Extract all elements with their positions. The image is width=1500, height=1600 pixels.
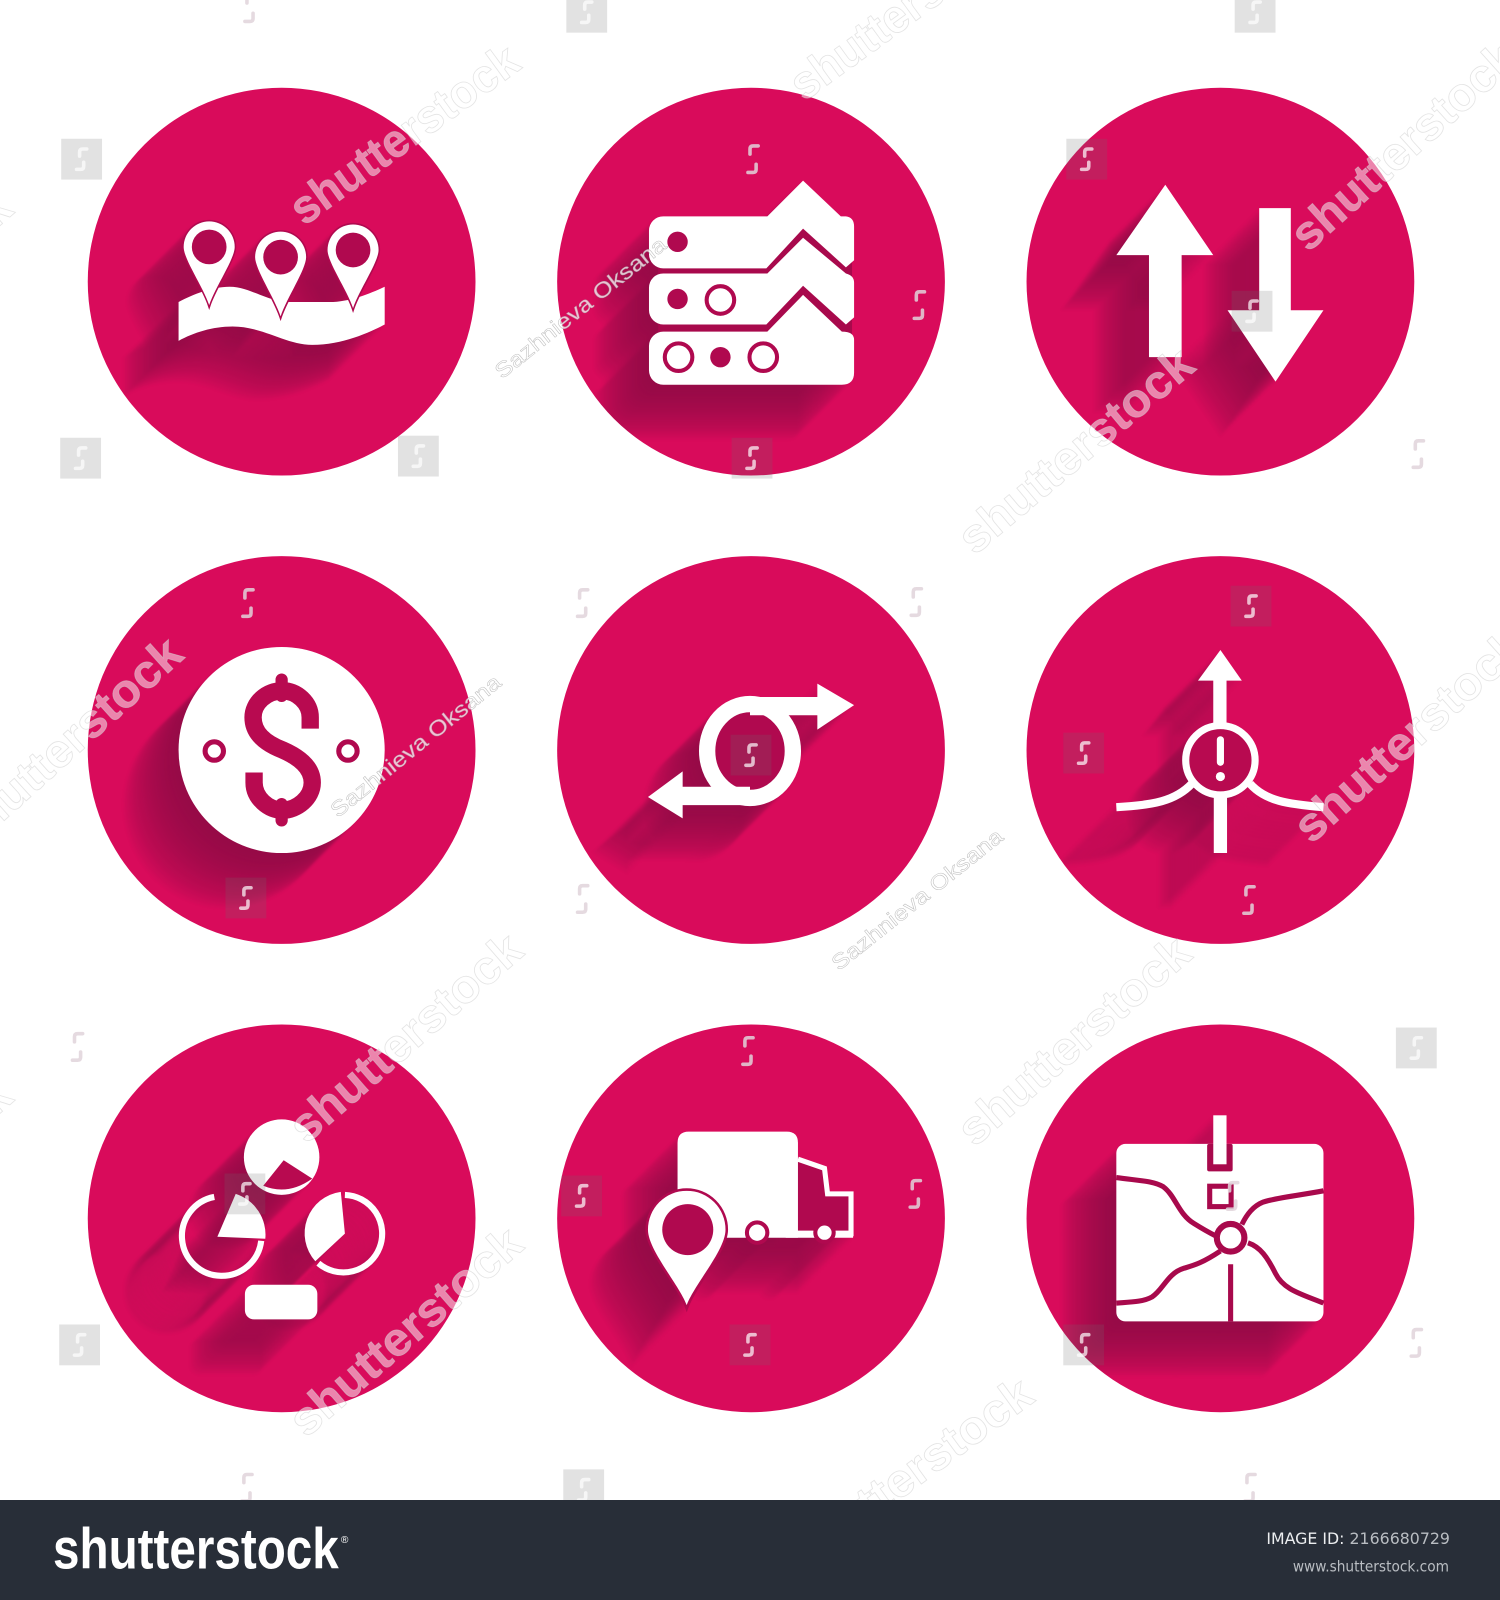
website: www.shutterstock.com <box>1293 1557 1449 1575</box>
icon: up arrow <box>1116 185 1213 357</box>
footer logo: shutterstock <box>53 1517 339 1581</box>
watermark text: Sazhnieva Oksana <box>490 232 671 383</box>
panel: exchange arrows <box>557 556 945 944</box>
registered mark: ® <box>341 1535 349 1546</box>
icon: three pie charts and a label <box>182 1119 382 1319</box>
panel: up and down arrows <box>1027 88 1414 476</box>
image id: IMAGE ID: 2166680729 <box>1266 1529 1450 1548</box>
icon: road junction with exclamation mark <box>1116 650 1323 853</box>
panel: pie charts <box>88 1024 476 1412</box>
watermark text: Sazhnieva Oksana <box>326 670 506 822</box>
icon: map with roads <box>1116 1115 1323 1321</box>
icon: map with three pins <box>179 221 385 345</box>
panel: junction warning <box>1027 556 1414 944</box>
watermark text: shutterstock <box>279 1216 533 1446</box>
icon: location pin <box>648 1191 726 1305</box>
icon: loop arrows <box>648 684 854 818</box>
icon: up and down arrows <box>1116 185 1323 382</box>
footer bar <box>0 1500 1500 1600</box>
watermark text: shutterstock <box>776 1366 1043 1580</box>
watermark text: shutterstock <box>279 922 533 1152</box>
icon: down arrow <box>1228 208 1323 382</box>
panel: server with growth arrows <box>557 88 945 476</box>
panel: dollar coin <box>88 556 476 944</box>
icon: truck <box>648 1132 853 1305</box>
panel: map with location pins <box>88 88 476 476</box>
watermark text: shutterstock <box>279 33 529 235</box>
icon: coin <box>179 647 385 853</box>
watermark text: shutterstock <box>947 925 1201 1156</box>
panel: delivery truck with pin <box>557 1024 945 1412</box>
icon: server stack <box>649 181 854 385</box>
watermark text: shutterstock <box>947 336 1204 564</box>
panel: road map with warning <box>1027 1024 1414 1412</box>
watermark text: Sazhnieva Oksana <box>827 824 1008 975</box>
